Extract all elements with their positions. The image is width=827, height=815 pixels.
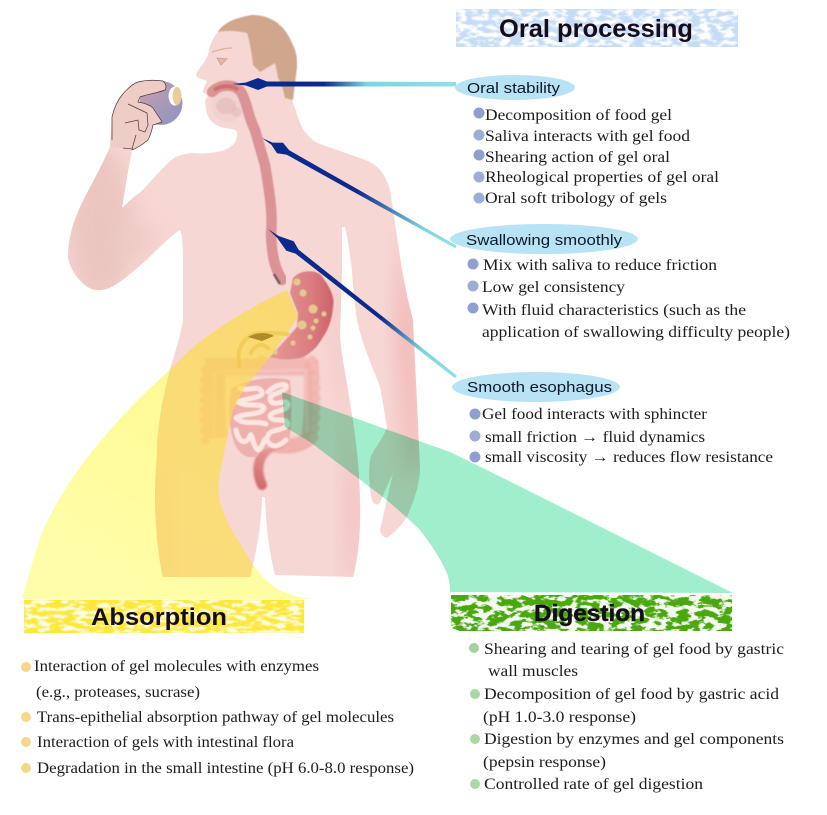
gallbladder <box>238 333 290 368</box>
absorption cone <box>22 290 313 599</box>
panel: swallowing smoothly: application of swallowing difficulty people) <box>482 324 790 341</box>
panel: digestion list: (pepsin response) <box>483 754 606 771</box>
hand <box>110 80 166 150</box>
panel: digestion list: Decomposition of gel food by gastric acid <box>484 686 779 703</box>
arrow: swallowing smoothly <box>262 138 457 248</box>
face details <box>207 48 232 92</box>
panel: swallowing smoothly <box>450 224 790 341</box>
arrow: oral stability <box>232 78 456 90</box>
panel: oral stability: Oral soft tribology of gels <box>485 190 667 207</box>
heading banner: absorption <box>24 600 304 633</box>
small intestine <box>229 378 291 457</box>
panel: oral stability: Decomposition of food gel <box>485 107 672 124</box>
heading banner: digestion: Digestion <box>534 600 645 626</box>
panel: digestion list <box>469 641 784 793</box>
hair <box>218 15 297 100</box>
digestion cone <box>282 392 733 593</box>
panel: digestion list: wall muscles <box>488 663 578 680</box>
panel: swallowing smoothly: Mix with saliva to reduce friction <box>483 257 717 274</box>
panel: absorption list: (e.g., proteases, sucrase) <box>36 684 200 701</box>
panel: oral stability: Saliva interacts with gel food <box>485 128 690 145</box>
panel: digestion list: Shearing and tearing of gel food by gastric <box>484 641 784 658</box>
panel: smooth esophagus: Smooth esophagus <box>467 379 612 396</box>
panel: smooth esophagus: small friction → fluid dynamics <box>485 429 705 446</box>
arrow: smooth esophagus <box>268 229 457 378</box>
panel: swallowing smoothly: Low gel consistency <box>482 279 625 296</box>
stomach <box>270 271 334 359</box>
panel: digestion list: Controlled rate of gel digestion <box>484 776 703 793</box>
panel: absorption list: Trans-epithelial absorption pathway of gel molecules <box>37 709 394 726</box>
panel: swallowing smoothly: With fluid characteristics (such as the <box>482 302 746 319</box>
panel: smooth esophagus <box>452 372 773 466</box>
panel: digestion list: Digestion by enzymes and gel components <box>484 731 784 748</box>
panel: oral stability: Rheological properties of gel oral <box>485 169 719 186</box>
panel: absorption list: Interaction of gels with intestinal flora <box>37 734 294 751</box>
heading banner: digestion <box>451 595 732 631</box>
human body figure <box>68 15 420 580</box>
rectum <box>258 444 280 485</box>
apple in hand <box>110 80 182 150</box>
panel: oral stability: Oral stability <box>467 80 561 97</box>
panel: swallowing smoothly: Swallowing smoothly <box>466 232 623 249</box>
panel: smooth esophagus: Gel food interacts with sphincter <box>482 406 708 423</box>
panel: smooth esophagus: small viscosity → reduces flow resistance <box>485 449 773 466</box>
panel: oral stability <box>455 75 719 207</box>
panel: absorption list: Interaction of gel molecules with enzymes <box>34 658 319 675</box>
heading banner: absorption: Absorption <box>91 604 227 631</box>
heading banner: oral processing <box>456 9 738 47</box>
panel: absorption list: Degradation in the small intestine (pH 6.0-8.0 response) <box>37 760 414 777</box>
oral cavity and esophagus <box>211 86 282 284</box>
panel: absorption list <box>21 658 414 777</box>
heading banner: oral processing: Oral processing <box>499 15 693 43</box>
panel: digestion list: (pH 1.0-3.0 response) <box>483 709 636 726</box>
panel: oral stability: Shearing action of gel oral <box>485 149 670 166</box>
large intestine <box>204 360 316 485</box>
